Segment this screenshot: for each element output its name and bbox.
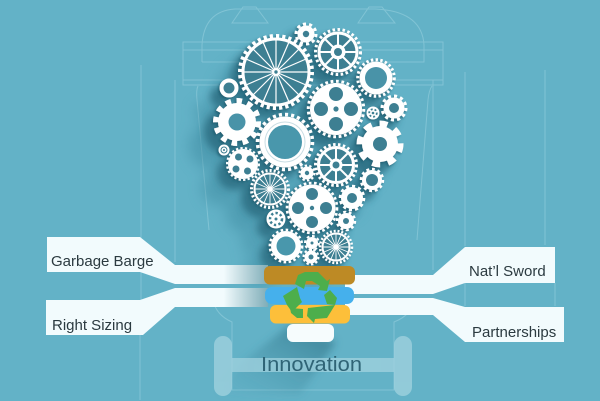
- long shadow: [189, 32, 398, 288]
- gear: perforated small: [266, 210, 286, 228]
- gear: small top: [296, 24, 316, 44]
- label band: Right Sizing: Right Sizing: [52, 317, 132, 334]
- gear: chunky right: [360, 124, 400, 164]
- gear: tiny right: [366, 106, 380, 120]
- gear: large ring centre: [258, 114, 312, 170]
- gear: large spoked: [240, 36, 312, 108]
- gear: chunky left: [216, 101, 258, 143]
- label band: Partnerships: Partnerships: [472, 324, 556, 341]
- stack shadow: [215, 325, 336, 395]
- gear: tiny ring left: [218, 144, 230, 156]
- gear: tiny bottom: [305, 236, 319, 250]
- label band: Nat'l Sword: [345, 247, 555, 294]
- gear: four hole left: [227, 148, 259, 180]
- gear: five hole centre: [308, 81, 364, 137]
- gear: tiny centre: [300, 166, 314, 180]
- gear: spoked middle right: [316, 144, 356, 186]
- label band: Nat'l Sword: Nat’l Sword: [469, 263, 546, 280]
- gear: ring upper right: [358, 60, 394, 96]
- gear: spoked lower left: [252, 170, 288, 208]
- gear: spoked bottom: [320, 231, 352, 263]
- cart handle and wheels: [214, 336, 412, 396]
- gear: small ring right: [361, 169, 383, 191]
- gear: ring bottom: [270, 230, 302, 262]
- trash bin outline: [140, 7, 555, 400]
- label: Innovation: Innovation: [261, 354, 362, 376]
- gear: small ring left: [222, 80, 236, 96]
- gear: spoked upper right: [316, 30, 360, 74]
- label band: Partnerships: [345, 298, 564, 342]
- gears cluster: [216, 24, 406, 264]
- gear: small right: [382, 96, 406, 120]
- gear: five hole lower: [287, 183, 337, 233]
- label band: Garbage Barge: Garbage Barge: [51, 253, 154, 270]
- bulb base stack: [264, 266, 355, 342]
- label band: Garbage Barge: [47, 237, 268, 284]
- label band: Right Sizing: [46, 288, 268, 335]
- gear: small lower right: [340, 186, 364, 210]
- gear: tiny lower right: [337, 212, 355, 230]
- gear: tiny lowest: [304, 250, 318, 264]
- icon: recycling symbol: [283, 272, 337, 323]
